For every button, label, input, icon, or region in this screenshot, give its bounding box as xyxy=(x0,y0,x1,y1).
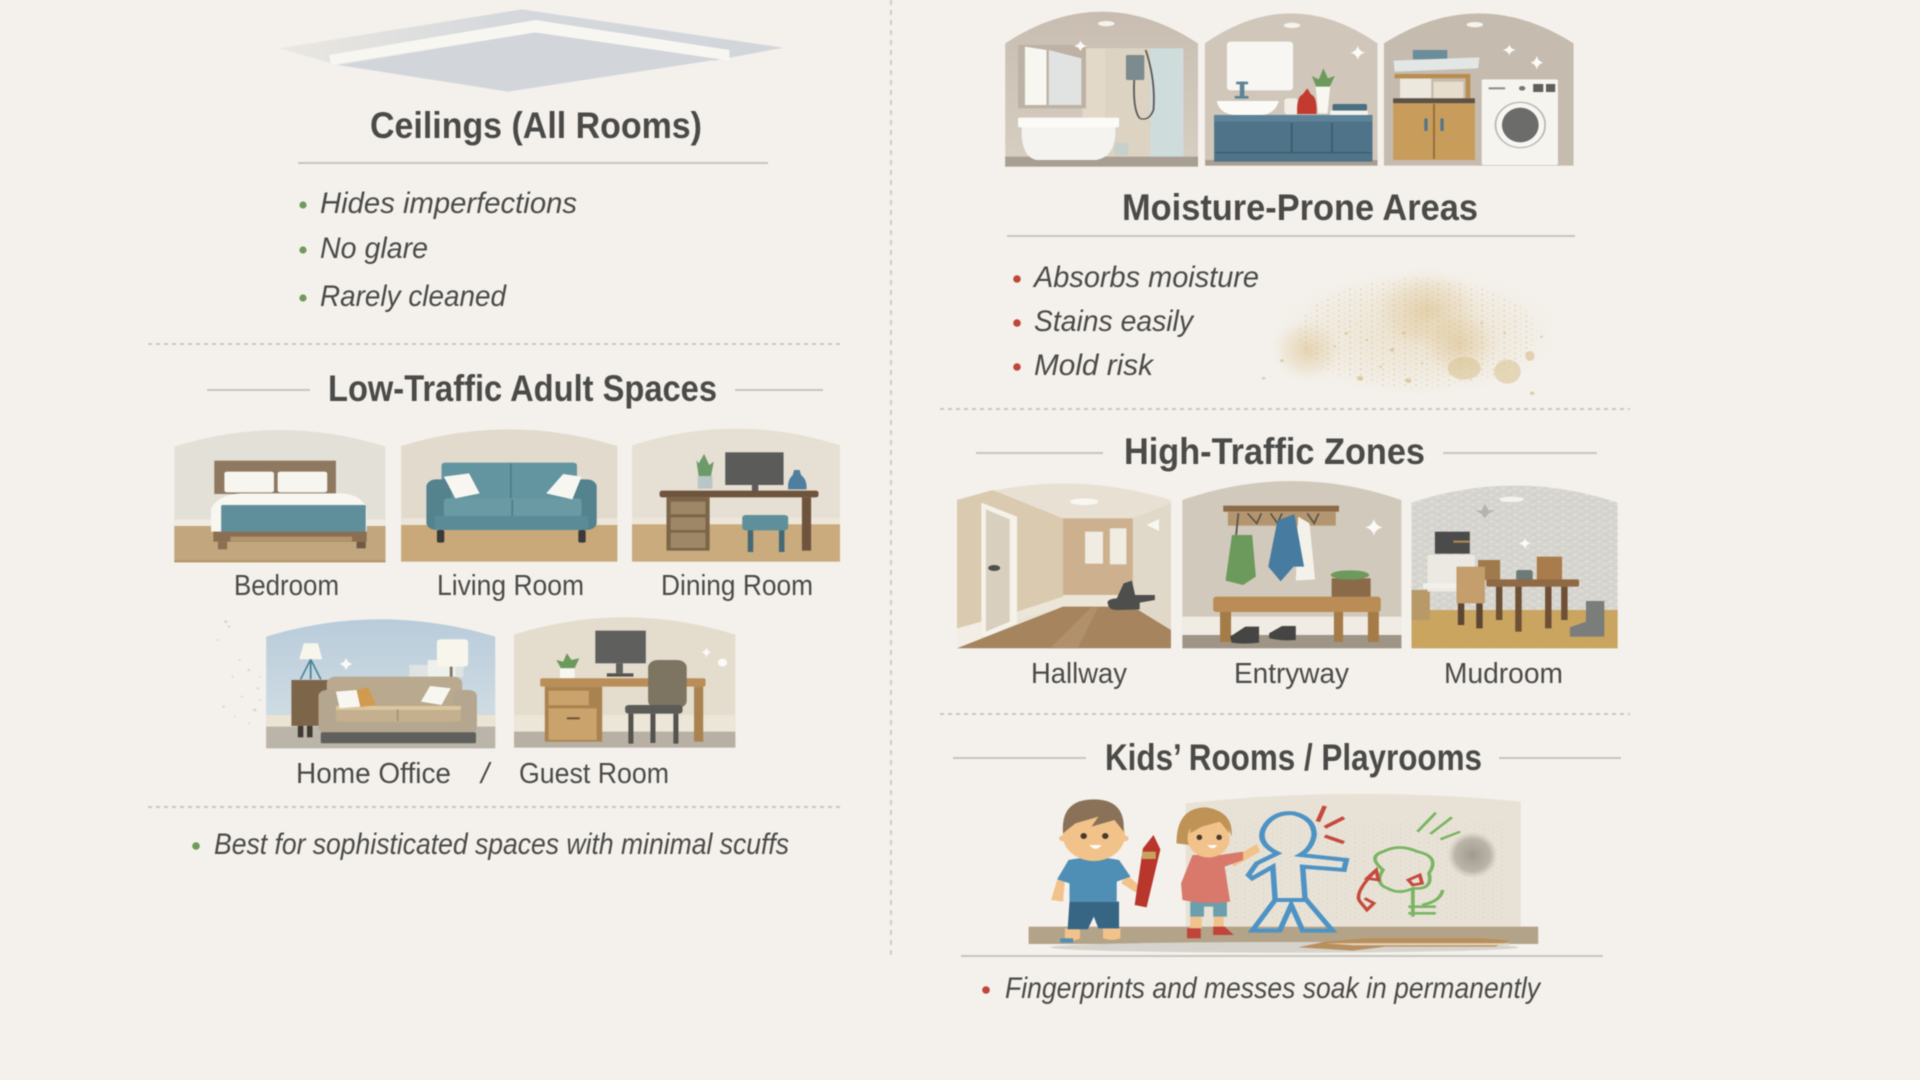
heading: ceilings: Ceilings (All Rooms) xyxy=(370,105,702,146)
labels: high-traffic rooms: Mudroom xyxy=(1444,658,1563,690)
labels: home office and guest room xyxy=(296,758,669,790)
label: bedroom: Bedroom xyxy=(234,570,339,602)
panel: moisture-prone areas xyxy=(1005,12,1575,400)
panel: ceilings xyxy=(279,9,784,313)
list: moisture drawbacks xyxy=(1013,261,1259,382)
label: living room: Living Room xyxy=(437,570,584,602)
panel: high-traffic zones xyxy=(957,431,1618,690)
decorative mold specks: left of home office xyxy=(217,620,261,724)
heading: high-traffic zones: High-Traffic Zones xyxy=(1124,431,1425,472)
chalk tree xyxy=(1375,847,1443,917)
list: ceilings benefits: No glare xyxy=(320,232,428,265)
girl xyxy=(1176,807,1260,938)
labels: high-traffic rooms xyxy=(1031,658,1563,690)
illustration: hallway xyxy=(957,483,1171,648)
icon: ceiling panel xyxy=(279,9,784,92)
illustration: dining room xyxy=(632,429,840,562)
boy xyxy=(1051,799,1160,943)
labels: home office and guest room: / xyxy=(479,758,492,790)
illustration: vanity xyxy=(1205,13,1378,166)
labels: home office and guest room: Guest Room xyxy=(519,758,669,790)
list: moisture drawbacks: Stains easily xyxy=(1034,305,1195,338)
labels: home office and guest room: Home Office xyxy=(296,758,451,790)
note: kids rooms: Fingerprints and messes soak in permanently xyxy=(1005,972,1542,1005)
wall xyxy=(1186,794,1521,927)
list: moisture drawbacks: Mold risk xyxy=(1034,349,1155,382)
note: low-traffic summary: Best for sophisticated spaces with minimal scuffs xyxy=(214,828,789,861)
panel: low-traffic adult spaces xyxy=(174,368,840,790)
illustration: living room xyxy=(401,429,617,562)
list: ceilings benefits xyxy=(299,187,577,313)
heading: moisture-prone areas: Moisture-Prone Areas xyxy=(1122,187,1478,228)
illustration: bathroom xyxy=(1005,12,1198,167)
heading: low-traffic adult spaces: Low-Traffic Adult Spaces xyxy=(328,368,717,409)
illustration: guest room xyxy=(514,617,735,748)
illustration: home office xyxy=(266,619,495,748)
illustration: bedroom xyxy=(174,430,386,562)
illustration: entryway xyxy=(1182,481,1401,648)
decoration: moisture stain xyxy=(1262,267,1569,400)
labels: high-traffic rooms: Entryway xyxy=(1234,658,1349,690)
list: moisture drawbacks: Absorbs moisture xyxy=(1032,261,1259,294)
illustration: kids drawing on wall xyxy=(1029,794,1538,953)
illustration: laundry xyxy=(1384,13,1574,166)
heading: kids rooms: Kids’ Rooms / Playrooms xyxy=(1105,737,1482,778)
panel: kids rooms and playrooms xyxy=(953,737,1621,1005)
label: dining room: Dining Room xyxy=(661,570,813,602)
illustration: mudroom xyxy=(1411,485,1618,648)
chalk figure xyxy=(1249,813,1346,931)
floor xyxy=(1029,927,1538,944)
list: ceilings benefits: Hides imperfections xyxy=(320,187,577,220)
labels: high-traffic rooms: Hallway xyxy=(1031,658,1127,690)
list: ceilings benefits: Rarely cleaned xyxy=(320,280,507,313)
